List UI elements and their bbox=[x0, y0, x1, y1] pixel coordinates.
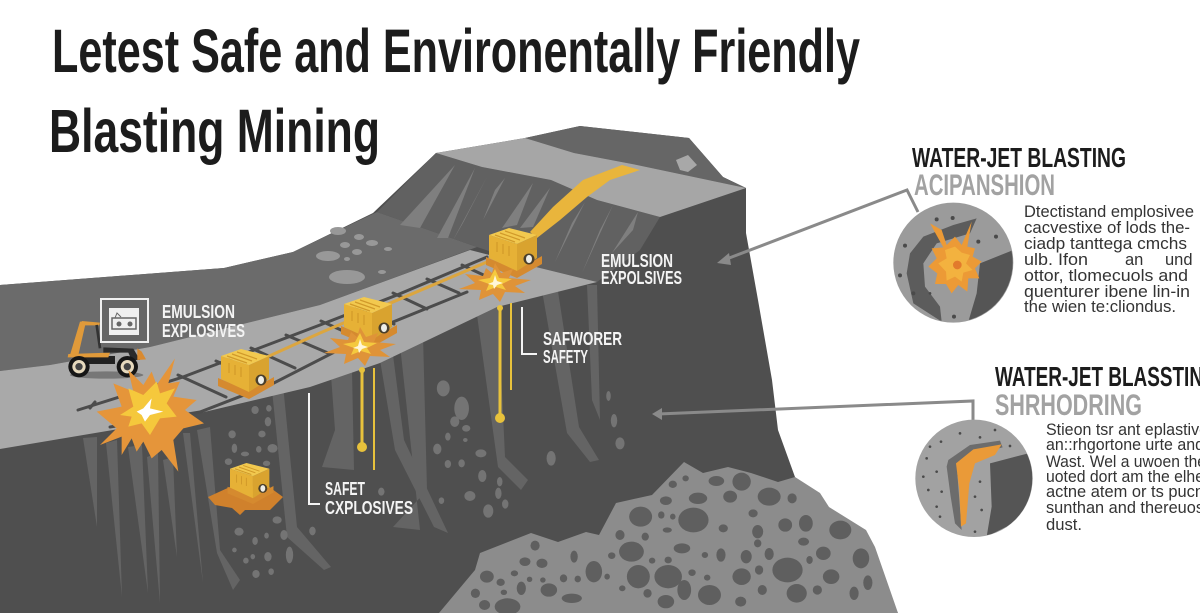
subheading: SHRHODRING bbox=[995, 389, 1142, 422]
description text: und bbox=[1165, 251, 1193, 269]
panel: water-jet blasting acipanshion bbox=[893, 142, 1194, 323]
upper-left bench surface bbox=[0, 212, 477, 371]
arrow: callout to water-jet acipanshion bbox=[717, 190, 918, 265]
description text: ciadp tanttega cmchs bbox=[1024, 235, 1187, 253]
summit surface bbox=[525, 126, 746, 188]
explosive box 4 on ledge bbox=[208, 463, 283, 515]
description text: Dtectistand emplosivee bbox=[1024, 203, 1194, 221]
rubble pile bbox=[439, 462, 898, 613]
description text bbox=[1024, 203, 1194, 316]
bench stones bbox=[316, 227, 392, 284]
explosive box 1 bbox=[218, 349, 274, 399]
large explosion bbox=[97, 358, 204, 472]
label: safworer safety bbox=[522, 307, 622, 367]
detonation cable on track bbox=[267, 262, 487, 357]
loader vehicle bbox=[68, 321, 146, 379]
icon: explosives sign bbox=[101, 299, 148, 342]
description text: actne atem or ts pucn bbox=[1046, 483, 1200, 501]
label: emulsion explosives left: EMULSION bbox=[162, 302, 235, 322]
subheading: ACIPANSHION bbox=[914, 169, 1055, 202]
summit stone bbox=[676, 155, 697, 172]
rock face striations bbox=[400, 165, 638, 273]
panel: mine cross-section bbox=[0, 126, 898, 613]
panel: water-jet blasting shrhodring bbox=[915, 361, 1200, 537]
dark rock body bbox=[0, 126, 898, 613]
mid rock face bbox=[377, 153, 660, 282]
description text: an bbox=[1125, 251, 1143, 269]
description text: the wien te:cliondus. bbox=[1024, 298, 1176, 316]
description text: ottor, tlomecuols and bbox=[1024, 267, 1188, 285]
circular detail: charge seam in rock bbox=[915, 420, 1037, 537]
label: emulsion explosives left: EXPLOSIVES bbox=[162, 321, 245, 341]
label: emulsion expolsives right: EMULSION bbox=[601, 251, 673, 271]
lower striations bbox=[83, 285, 600, 603]
upper bench bbox=[436, 138, 746, 217]
description text bbox=[1046, 421, 1200, 534]
label: emulsion expolsives right: EXPOLSIVES bbox=[601, 268, 682, 288]
pebbles bbox=[225, 380, 625, 578]
label: emulsion expolsives right bbox=[601, 251, 682, 288]
title: Blasting Mining bbox=[49, 97, 380, 165]
small blast 3 bbox=[459, 263, 531, 302]
title: Letest Safe and Environentally Friendly bbox=[52, 17, 860, 85]
yellow charge lines bbox=[357, 303, 511, 470]
small blast 2 bbox=[324, 327, 396, 366]
description text: quenturer ibene lin-in bbox=[1024, 283, 1190, 301]
description text: dust. bbox=[1046, 516, 1082, 534]
label: safworer safety: SAFETY bbox=[543, 347, 588, 367]
label: safworer safety: SAFWORER bbox=[543, 329, 622, 349]
description text: cacvestixe of lods the- bbox=[1024, 219, 1190, 237]
arrow: callout to water-jet shrhodring bbox=[652, 401, 973, 420]
circular detail: blast in rock bbox=[893, 203, 1017, 323]
description text: ulb. Ifon bbox=[1024, 251, 1088, 269]
haul road bbox=[0, 250, 597, 449]
rail track bbox=[78, 257, 490, 427]
label: emulsion explosives left bbox=[162, 302, 245, 341]
label: safet cxplosives: SAFET bbox=[325, 479, 365, 499]
label: safet cxplosives bbox=[309, 393, 413, 518]
explosive box 3 bbox=[486, 228, 542, 278]
title bbox=[49, 17, 860, 165]
explosive box 2 bbox=[341, 297, 397, 347]
label: safet cxplosives: CXPLOSIVES bbox=[325, 498, 413, 518]
main yellow feed line bbox=[530, 165, 640, 238]
